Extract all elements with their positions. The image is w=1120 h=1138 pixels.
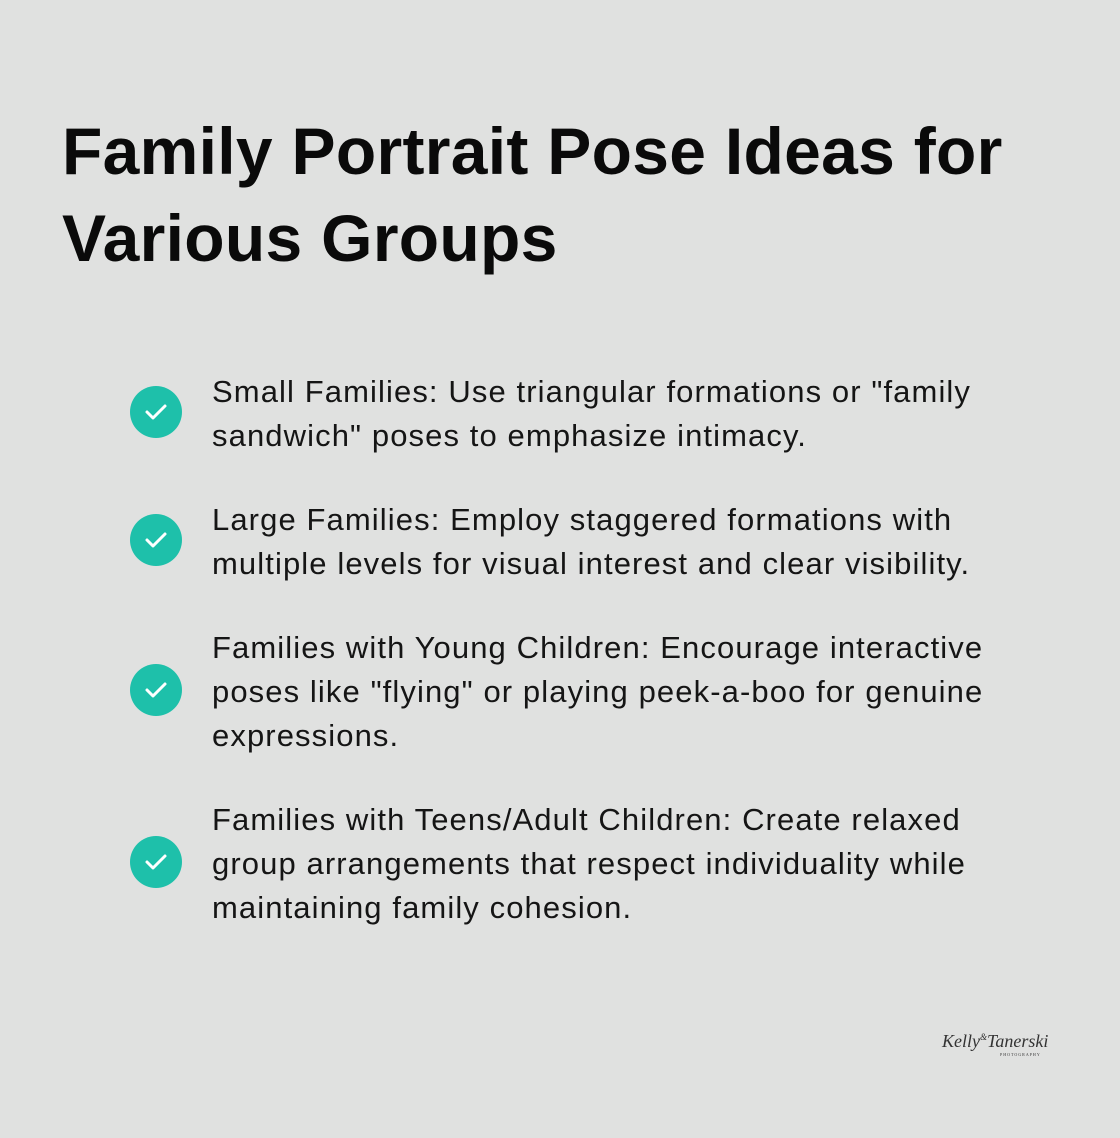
icon: check xyxy=(130,386,182,438)
text: small families xyxy=(212,374,971,453)
logo: signature: Kelly&Tanerski xyxy=(942,1031,1048,1051)
logo: signature: PHOTOGRAPHY xyxy=(1000,1052,1041,1057)
item: small families xyxy=(130,374,971,453)
text: young children: expressions. xyxy=(212,718,399,753)
text: teens: Families with Teens/Adult Children: Create relaxed xyxy=(212,802,961,837)
item: large families xyxy=(130,502,970,581)
icon: check xyxy=(130,514,182,566)
text: teens: maintaining family cohesion. xyxy=(212,890,632,925)
item: teens xyxy=(130,802,966,925)
text: small families: Small Families: Use triangular formations or "family xyxy=(212,374,971,409)
text: large families: Large Families: Employ staggered formations with xyxy=(212,502,952,537)
title: Family Portrait Pose Ideas for xyxy=(62,114,1003,188)
item: young children xyxy=(130,630,983,753)
text: teens xyxy=(212,802,966,925)
text: teens: group arrangements that respect individuality while xyxy=(212,846,966,881)
title: Various Groups xyxy=(62,201,558,275)
icon: check xyxy=(130,664,182,716)
text: large families xyxy=(212,502,970,581)
text: young children xyxy=(212,630,983,753)
text: small families: sandwich" poses to emphasize intimacy. xyxy=(212,418,807,453)
title xyxy=(62,114,1003,275)
icon: check xyxy=(130,836,182,888)
text: young children: Families with Young Children: Encourage interactive xyxy=(212,630,983,665)
text: young children: poses like "flying" or playing peek-a-boo for genuine xyxy=(212,674,983,709)
text: large families: multiple levels for visual interest and clear visibility. xyxy=(212,546,970,581)
